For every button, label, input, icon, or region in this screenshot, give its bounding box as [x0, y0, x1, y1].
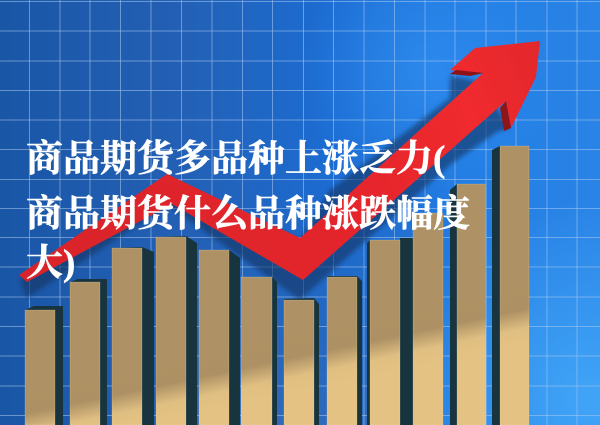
arrow dark folds: [450, 70, 484, 76]
red arrow: [19, 41, 540, 282]
bar chart: [25, 146, 529, 425]
bars: [25, 146, 529, 425]
title: 大): [26, 242, 75, 284]
title: 商品期货多品种上涨乏力(: [26, 138, 445, 180]
bar shadows: [25, 146, 500, 425]
title: [26, 138, 470, 284]
title: 商品期货什么品种涨跌幅度: [26, 193, 470, 235]
arrow body: [19, 41, 540, 282]
arrow shadow: [20, 76, 510, 300]
